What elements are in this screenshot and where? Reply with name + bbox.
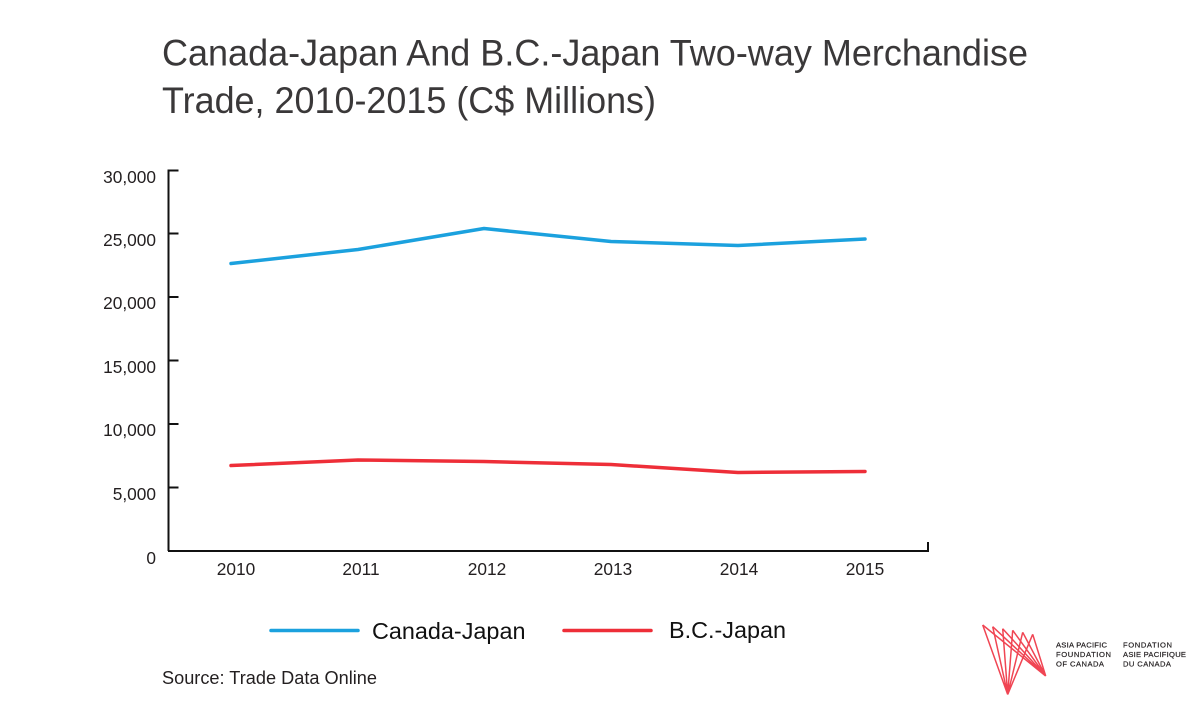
logo: Asia Pacific Foundation of Canada <box>983 625 1186 694</box>
y axis with ticks <box>168 170 178 551</box>
logo text: English: OF CANADA <box>1056 659 1105 668</box>
title <box>162 32 1028 121</box>
x axis labels: 2013 <box>594 559 632 579</box>
line: Canada-Japan <box>231 228 865 264</box>
y axis labels: 30,000 <box>103 167 156 187</box>
title: Canada-Japan And B.C.-Japan Two-way Merchandise <box>162 32 1028 74</box>
legend <box>271 617 786 644</box>
x axis labels <box>217 559 884 579</box>
x axis labels: 2015 <box>846 559 884 579</box>
x axis labels: 2012 <box>468 559 506 579</box>
x axis <box>168 542 928 551</box>
logo text: French: DU CANADA <box>1123 659 1172 668</box>
source note: Source: Trade Data Online <box>162 668 377 688</box>
y axis labels: 20,000 <box>103 293 156 313</box>
logo text: French: FONDATION <box>1123 641 1172 650</box>
y axis labels: 0 <box>146 548 156 568</box>
logo mark <box>983 625 1046 694</box>
y axis labels: 10,000 <box>103 420 156 440</box>
x axis labels: 2011 <box>342 559 380 579</box>
logo text: English <box>1056 641 1111 668</box>
logo text: English: ASIA PACIFIC <box>1056 641 1108 650</box>
title: Trade, 2010-2015 (C$ Millions) <box>162 80 656 121</box>
logo text: French <box>1123 641 1186 668</box>
logo text: English: FOUNDATION <box>1056 650 1111 659</box>
x axis labels: 2014 <box>720 559 759 579</box>
logo text: French: ASIE PACIFIQUE <box>1123 650 1186 659</box>
y axis labels: 25,000 <box>103 230 156 250</box>
y axis labels: 15,000 <box>103 357 156 377</box>
legend item: B.C.-Japan: B.C.-Japan <box>669 617 786 643</box>
y axis labels: 5,000 <box>113 484 156 504</box>
line: B.C.-Japan <box>231 460 865 472</box>
legend item: Canada-Japan: Canada-Japan <box>372 618 525 644</box>
y axis labels <box>103 167 156 568</box>
x axis labels: 2010 <box>217 559 255 579</box>
